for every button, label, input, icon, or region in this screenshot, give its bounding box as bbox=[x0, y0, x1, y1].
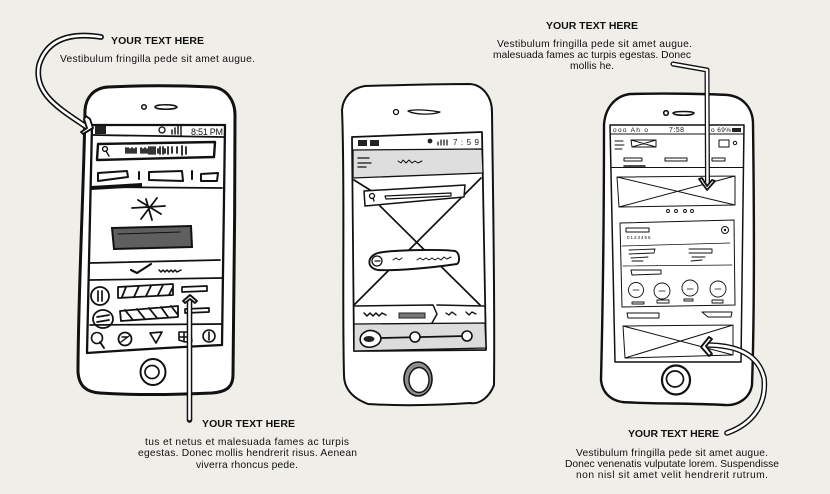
star icon bbox=[132, 198, 165, 220]
phone 2 screen bbox=[352, 132, 486, 351]
phone 2 body bbox=[342, 84, 494, 405]
arrow: bottom left callout bbox=[183, 295, 197, 420]
callout text: bottom right: Donec venenatis vulputate lorem. Suspendisse bbox=[565, 459, 779, 470]
home button bbox=[662, 366, 690, 394]
progress rows bbox=[91, 284, 209, 328]
map placeholder cross bbox=[354, 178, 481, 305]
grey slider band bbox=[354, 323, 486, 351]
phone 2: map wireframe bbox=[342, 84, 494, 405]
callout text: top left: Vestibulum fringilla pede sit amet augue. bbox=[60, 54, 255, 65]
arrow: bottom right callout bbox=[701, 337, 764, 433]
second image placeholder bbox=[623, 325, 733, 358]
callout text: bottom left: tus et netus et malesuada fames ac turpis bbox=[145, 437, 349, 448]
bottom icons bbox=[90, 324, 222, 348]
phone 3: dashboard wireframe bbox=[601, 94, 754, 405]
nav row bbox=[615, 140, 737, 149]
home button bbox=[140, 359, 166, 385]
callout text: bottom left bbox=[138, 418, 357, 471]
status bar: o 69% bbox=[711, 127, 731, 134]
callout text: top right: malesuada fames ac turpis egestas. Donec bbox=[493, 50, 691, 61]
phone 1 body bbox=[78, 86, 235, 394]
callout text: bottom left: viverra rhoncus pede. bbox=[196, 460, 298, 471]
status bar bbox=[610, 127, 744, 134]
callout text: bottom right: YOUR TEXT HERE bbox=[628, 428, 719, 440]
status bar bbox=[92, 125, 224, 137]
arrow: top right callout bbox=[673, 64, 715, 190]
location pill bbox=[369, 250, 459, 270]
callout text: bottom left: YOUR TEXT HERE bbox=[202, 418, 295, 430]
tabs bbox=[611, 158, 743, 168]
grey nav band bbox=[353, 149, 483, 178]
home button bbox=[404, 362, 432, 396]
earpiece and camera bbox=[142, 105, 177, 109]
search pill bbox=[364, 185, 465, 206]
phone 3 body bbox=[601, 94, 754, 405]
info card bbox=[620, 220, 735, 307]
earpiece and camera bbox=[394, 110, 440, 114]
status bar: 8:51 PM bbox=[191, 127, 223, 137]
pagination dots bbox=[666, 210, 694, 212]
callout text: bottom right: non nisl sit amet velit hendrerit rutrum. bbox=[576, 470, 768, 481]
phone 3 screen bbox=[610, 125, 744, 362]
tabs bbox=[91, 171, 222, 190]
callout text: top right: Vestibulum fringilla pede sit amet augue. bbox=[497, 39, 692, 50]
callout text: top left bbox=[60, 35, 255, 65]
lower bar bbox=[355, 305, 484, 323]
callout text: top right: mollis he. bbox=[570, 61, 614, 72]
section labels bbox=[627, 312, 732, 318]
phone 1: media player wireframe bbox=[78, 86, 235, 394]
status bar: 7:59 bbox=[453, 138, 480, 147]
info card: 0123456 bbox=[627, 235, 652, 240]
callout text: bottom right: Vestibulum fringilla pede sit amet augue. bbox=[576, 448, 768, 459]
callout text: top right bbox=[493, 20, 692, 72]
callout text: top left: YOUR TEXT HERE bbox=[111, 35, 204, 47]
status bar bbox=[358, 138, 480, 147]
status bar: ooo Ah o bbox=[613, 127, 648, 134]
callout text: bottom left: egestas. Donec mollis hendrerit risus. Aenean bbox=[138, 448, 357, 459]
banner image placeholder bbox=[617, 176, 735, 207]
status bar: 7:58 bbox=[669, 127, 684, 134]
search box bbox=[97, 142, 215, 160]
phone 1 screen bbox=[87, 125, 225, 353]
divider with check mark bbox=[90, 260, 222, 280]
callout text: top right: YOUR TEXT HERE bbox=[546, 20, 638, 32]
earpiece and camera bbox=[664, 111, 694, 115]
dark content block bbox=[112, 226, 192, 249]
arrow: top left callout bbox=[38, 36, 101, 134]
callout text: bottom right bbox=[565, 428, 779, 481]
